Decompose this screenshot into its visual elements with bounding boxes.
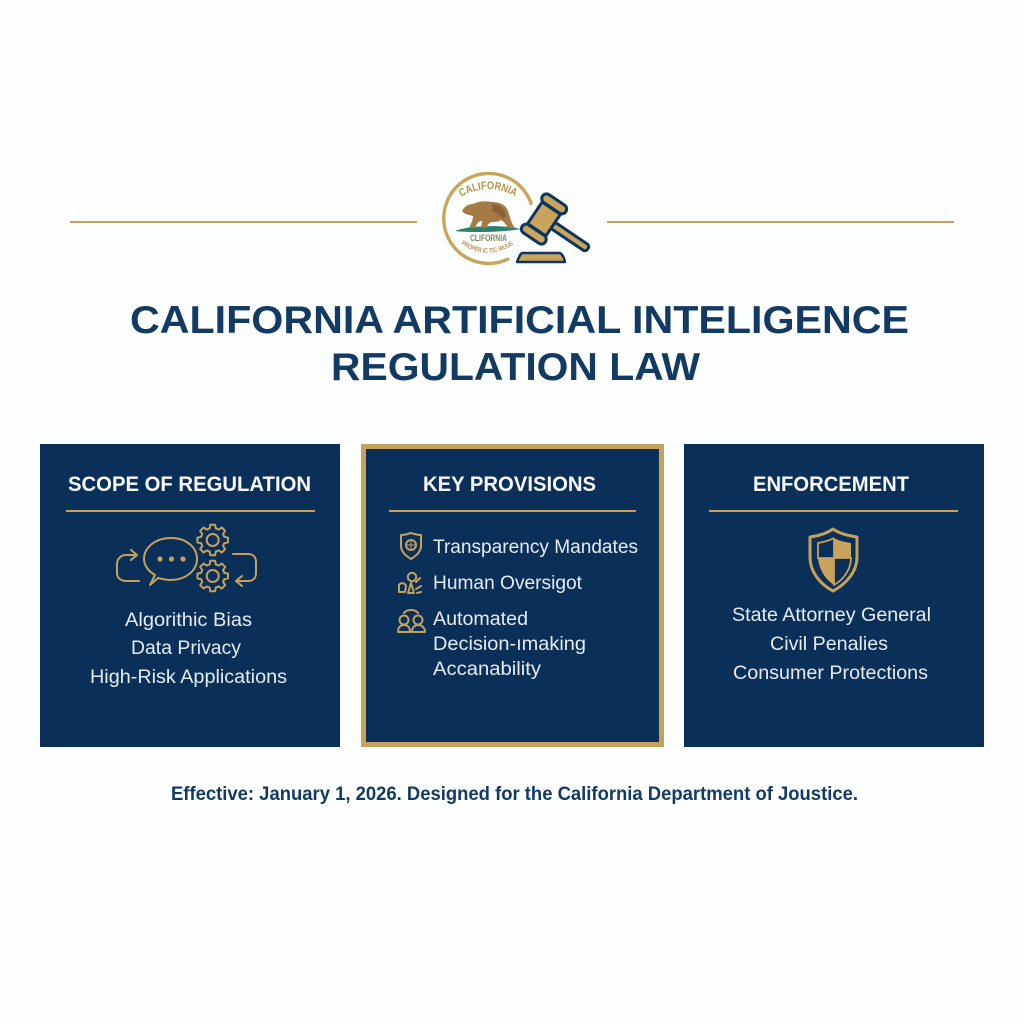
icon: human oversight (399, 573, 421, 593)
text: automated decision-making accountability: Automated (433, 609, 528, 630)
icon: automated decision people (398, 610, 425, 632)
footer note: Effective: January 1, 2026. Designed for the California Department of Joustice. (171, 784, 858, 805)
panel: scope of regulation (40, 444, 340, 747)
list: scope items: Algorithic Bias (125, 610, 252, 631)
icon: California seal: CALIFORNIA (459, 181, 516, 196)
list: scope items: High-Risk Applications (90, 667, 287, 688)
icon: transparency shield (401, 533, 421, 559)
icon: gavel (517, 192, 601, 268)
icon: California seal: CLIFORNIA (470, 233, 507, 244)
list: scope items (90, 610, 287, 688)
text: automated decision-making accountability (433, 609, 586, 680)
heading: scope of regulation: SCOPE OF REGULATION (68, 473, 311, 496)
list: enforcement items: Consumer Protections (733, 663, 928, 684)
icon: chat bubble, gears and cycle arrows (117, 525, 256, 591)
list: scope items: Data Privacy (131, 638, 242, 659)
panel: enforcement (684, 444, 984, 747)
text: automated decision-making accountability: Accanability (433, 659, 542, 680)
heading: key provisions: KEY PROVISIONS (423, 473, 596, 496)
heading: enforcement: ENFORCEMENT (753, 473, 909, 496)
text: automated decision-making accountability: Decision-ımaking (433, 634, 586, 655)
title: REGULATION LAW (331, 346, 700, 389)
icon: California seal: PROPER IC TIC WUUS (461, 240, 513, 253)
list: enforcement items: Civil Penalies (770, 634, 888, 655)
title (130, 299, 909, 389)
icon: California seal (442, 172, 533, 266)
icon: quartered shield (810, 529, 857, 591)
list: enforcement items (732, 605, 931, 684)
list: enforcement items: State Attorney General (732, 605, 931, 626)
title: CALIFORNIA ARTIFICIAL INTELIGENCE (130, 299, 909, 342)
text: human oversight: Human Oversigot (433, 573, 583, 594)
text: transparency mandates: Transparency Mandates (433, 537, 638, 558)
panel: key provisions (364, 446, 662, 744)
